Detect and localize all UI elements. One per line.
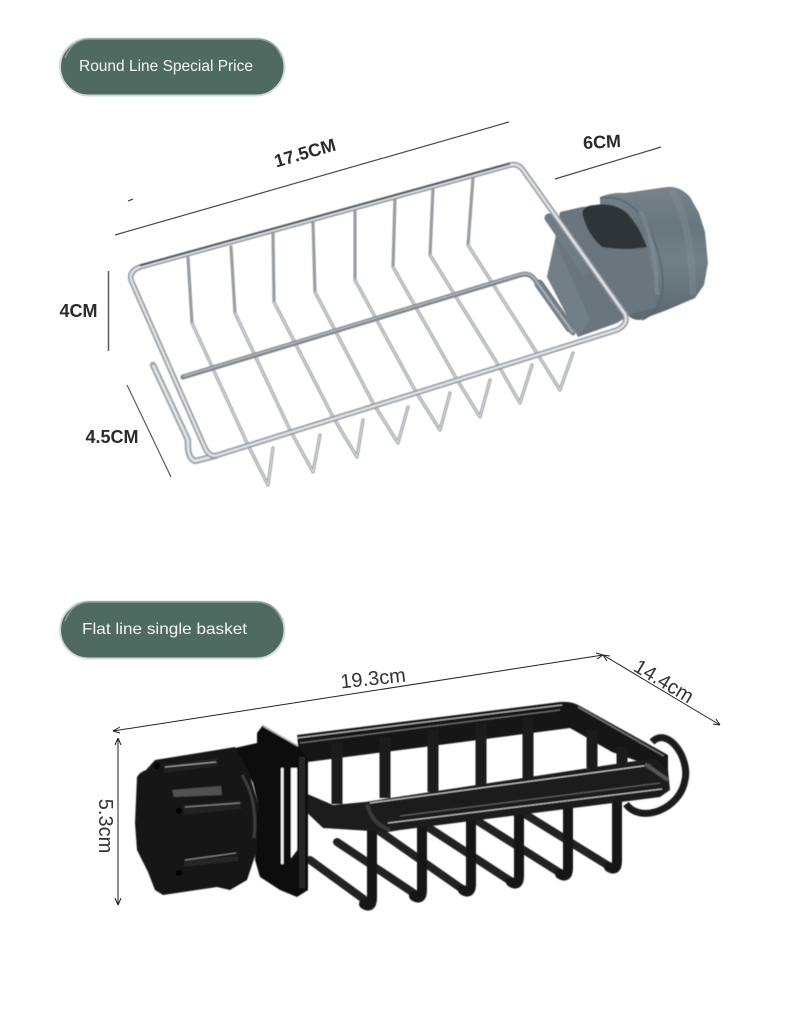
clamp bracket <box>235 725 308 897</box>
dimension: 19.3cm length: 19.3cm <box>339 665 407 693</box>
back band <box>297 702 668 772</box>
dimension: 4CM height <box>59 271 108 351</box>
heading pill: Round Line Special Price <box>60 38 284 96</box>
hook ring <box>626 738 686 813</box>
dimension: 4CM height: 4CM <box>59 301 98 321</box>
heading pill: Round Line Special Price: Round Line Special Price <box>79 58 253 75</box>
dimension: 17.5CM length: 17.5CM <box>272 135 338 171</box>
dimension: 5.3cm height: 5.3cm <box>94 799 116 853</box>
front posts <box>364 800 617 906</box>
dimension: 19.3cm length <box>113 653 603 733</box>
dimension: 14.4cm width <box>603 655 720 725</box>
bottom diagonals <box>310 808 612 903</box>
front band and side arm <box>298 758 670 832</box>
wire ribs <box>188 178 573 485</box>
heading pill: Flat line single basket: Flat line single basket <box>82 621 248 638</box>
dimension: 6CM width <box>555 131 661 179</box>
product: silver wire basket <box>131 164 708 485</box>
gray faucet clamp <box>539 187 708 337</box>
heading pill: Flat line single basket <box>60 602 284 658</box>
back posts <box>337 718 622 804</box>
dimension: 14.4cm width: 14.4cm <box>630 656 697 708</box>
inner rail <box>183 274 573 377</box>
small tick mark <box>128 199 133 201</box>
dimension: 5.3cm height <box>94 738 121 905</box>
side hook <box>153 365 215 461</box>
outer rim <box>131 165 626 456</box>
dimension: 17.5CM length <box>115 122 509 235</box>
dimension: 4.5CM depth: 4.5CM <box>85 427 139 447</box>
dimension: 4.5CM depth <box>85 385 171 477</box>
dimension: 6CM width: 6CM <box>582 131 622 153</box>
product: black flat-line basket <box>135 702 686 906</box>
black knob <box>135 747 258 895</box>
